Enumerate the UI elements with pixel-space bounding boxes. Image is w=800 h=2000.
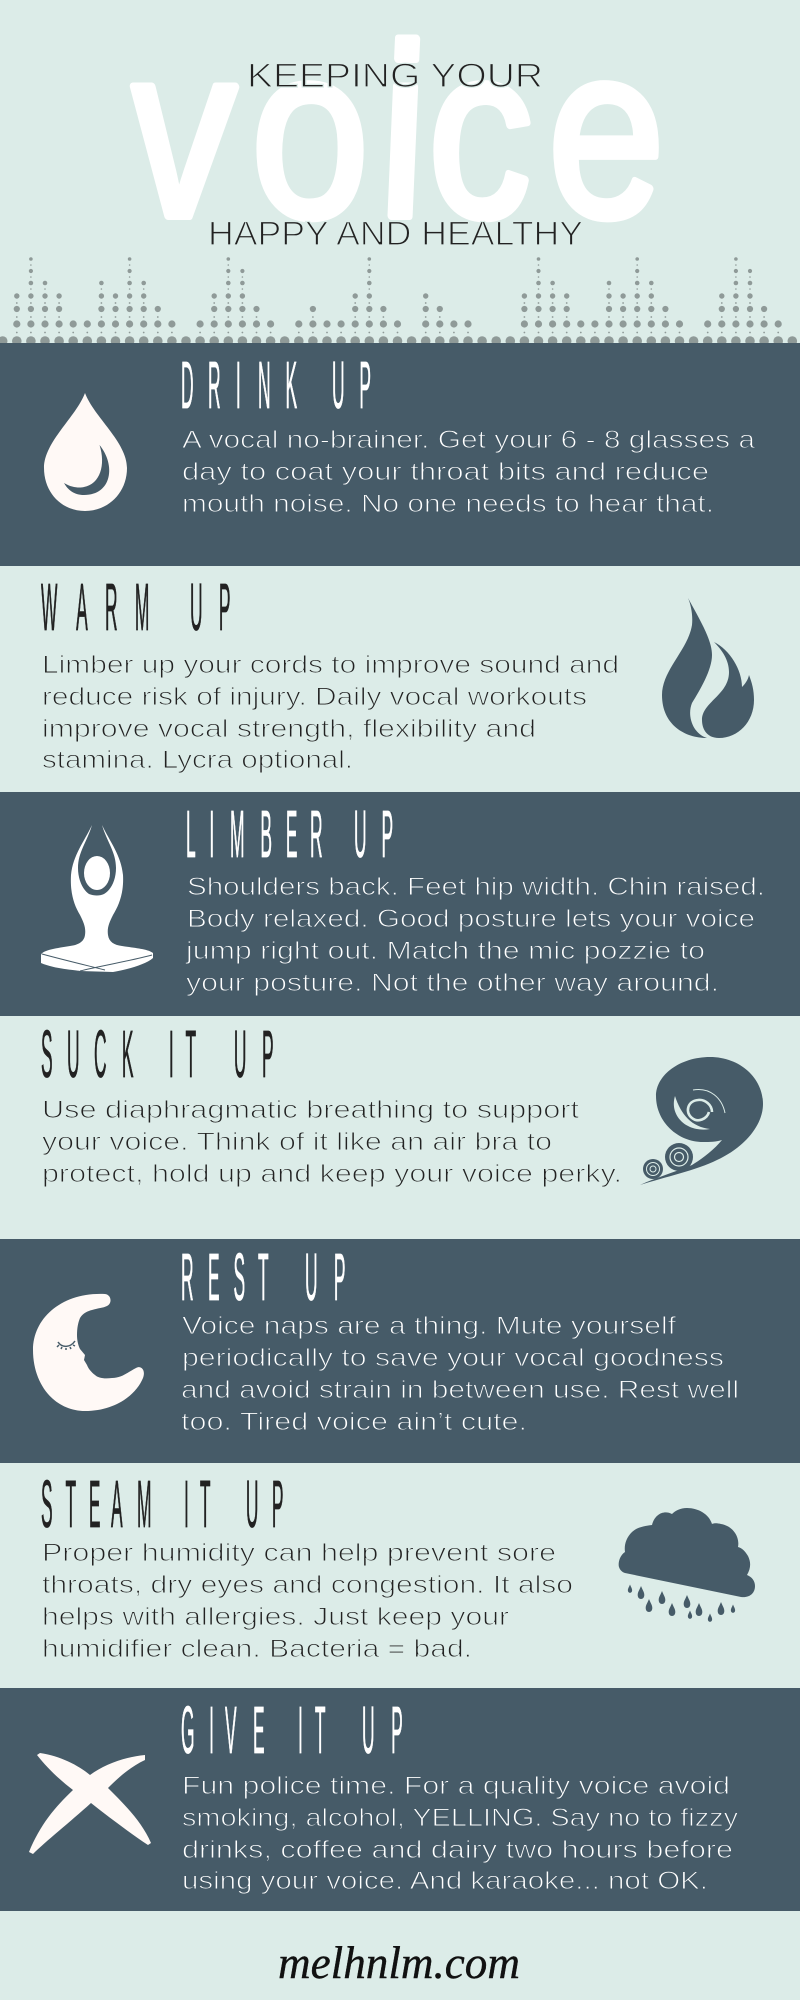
text: give it up: Fun police time. For a quality voice avoid	[182, 1772, 730, 1800]
text: give it up: smoking, alcohol, YELLING. Say no to fizzy	[182, 1804, 739, 1832]
brush word: voice: voice	[111, 0, 679, 269]
panel: limber up	[0, 792, 800, 1016]
panel: steam it up	[41, 1468, 755, 1663]
text: steam it up: humidifier clean. Bacteria = bad.	[42, 1635, 472, 1663]
text: give it up: drinks, coffee and dairy two hours before	[182, 1836, 733, 1864]
website footer: melhnlm.com	[278, 1937, 520, 1988]
heading: steam it up: STEAM IT UP	[41, 1468, 284, 1542]
heading: suck it up: SUCK IT UP	[41, 1018, 274, 1092]
text: rest up: too. Tired voice ain’t cute.	[181, 1408, 527, 1436]
text: warm up: improve vocal strength, flexibility and	[42, 715, 536, 743]
text: steam it up: helps with allergies. Just keep your	[42, 1603, 509, 1631]
text: warm up: stamina. Lycra optional.	[42, 746, 353, 774]
text: suck it up: protect, hold up and keep your voice perky.	[42, 1160, 622, 1188]
text: warm up: reduce risk of injury. Daily vocal workouts	[42, 683, 587, 711]
text: limber up	[185, 873, 765, 997]
heading: give it up: GIVE IT UP	[181, 1694, 403, 1768]
text: steam it up: Proper humidity can help prevent sore	[42, 1539, 556, 1567]
icon: cross	[29, 1753, 151, 1854]
icon: water drop	[44, 393, 127, 511]
text: rest up: and avoid strain in between use. Rest well	[181, 1376, 739, 1404]
text: drink up: day to coat your throat bits and reduce	[182, 458, 709, 486]
text: steam it up	[42, 1539, 573, 1663]
icon: yoga figure	[41, 825, 153, 972]
heading: rest up: REST UP	[181, 1241, 346, 1315]
text: steam it up: throats, dry eyes and congestion. It also	[42, 1571, 573, 1599]
text: rest up: Voice naps are a thing. Mute yourself	[182, 1312, 676, 1340]
panel: give it up	[0, 1688, 800, 1911]
icon: flame	[662, 598, 754, 738]
text: limber up: Shoulders back. Feet hip width. Chin raised.	[187, 873, 765, 901]
equalizer dots	[0, 257, 797, 346]
panel: suck it up	[41, 1018, 763, 1188]
text: suck it up	[42, 1096, 622, 1188]
text: drink up: mouth noise. No one needs to hear that.	[182, 490, 714, 518]
text: limber up: Body relaxed. Good posture lets your voice	[187, 905, 755, 933]
icon: wind spiral	[640, 1057, 763, 1185]
text: drink up	[182, 426, 755, 518]
text: rest up: periodically to save your vocal goodness	[182, 1344, 724, 1372]
icon: rain cloud	[619, 1508, 755, 1622]
title: keeping your: KEEPING YOUR	[247, 57, 543, 95]
text: suck it up: Use diaphragmatic breathing to support	[42, 1096, 579, 1124]
heading: drink up: DRINK UP	[181, 349, 371, 423]
text: give it up: using your voice. And karaoke... not OK.	[182, 1867, 708, 1895]
title: happy and healthy: HAPPY AND HEALTHY	[208, 215, 583, 253]
text: limber up: your posture. Not the other way around.	[186, 969, 719, 997]
panel: rest up	[0, 1239, 800, 1463]
text: give it up	[182, 1772, 739, 1895]
text: warm up	[42, 651, 619, 774]
panel: drink up	[0, 343, 800, 566]
text: limber up: jump right out. Match the mic pozzie to	[185, 937, 705, 965]
text: suck it up: your voice. Think of it like an air bra to	[42, 1128, 552, 1156]
icon: sleeping moon	[33, 1294, 144, 1411]
text: rest up	[181, 1312, 739, 1436]
heading: warm up: WARM UP	[41, 571, 230, 645]
text: drink up: A vocal no-brainer. Get your 6 - 8 glasses a	[182, 426, 755, 454]
text: warm up: Limber up your cords to improve sound and	[42, 651, 619, 679]
heading: limber up: LIMBER UP	[186, 798, 393, 872]
panel: warm up	[41, 571, 754, 774]
